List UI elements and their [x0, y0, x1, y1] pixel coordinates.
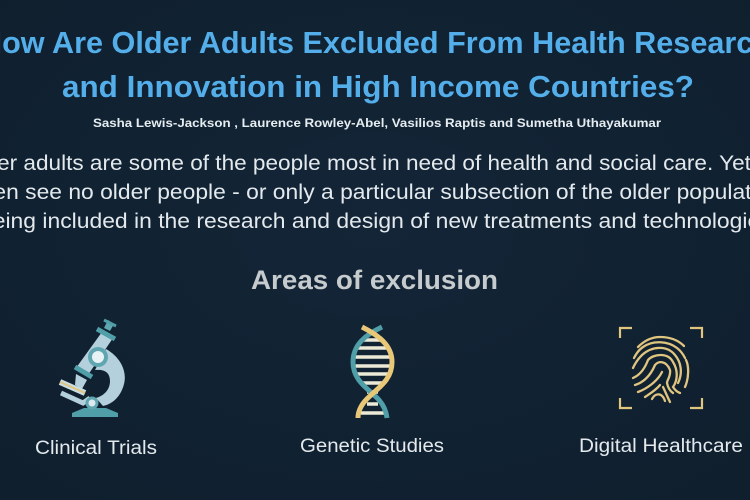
label: clinical trials: Clinical Trials [35, 438, 157, 459]
panel: genetic studies [300, 327, 444, 457]
heading: areas of exclusion: Areas of exclusion [251, 265, 498, 295]
intro paragraph: being included in the research and design of new treatments and technologies. [0, 209, 750, 233]
icon: microscope [60, 320, 125, 417]
panel: digital healthcare [579, 328, 743, 457]
title [0, 25, 750, 104]
authors: Sasha Lewis-Jackson , Laurence Rowley-Abel, Vasilios Raptis and Sumetha Uthayakumar [93, 118, 662, 130]
title: and Innovation in High Income Countries? [62, 69, 694, 104]
icon: fingerprint [620, 328, 702, 408]
label: genetic studies: Genetic Studies [300, 436, 444, 457]
icon: dna helix [353, 327, 392, 418]
intro paragraph [0, 151, 750, 233]
label: digital healthcare: Digital Healthcare [579, 436, 743, 457]
panel: clinical trials [35, 320, 157, 459]
